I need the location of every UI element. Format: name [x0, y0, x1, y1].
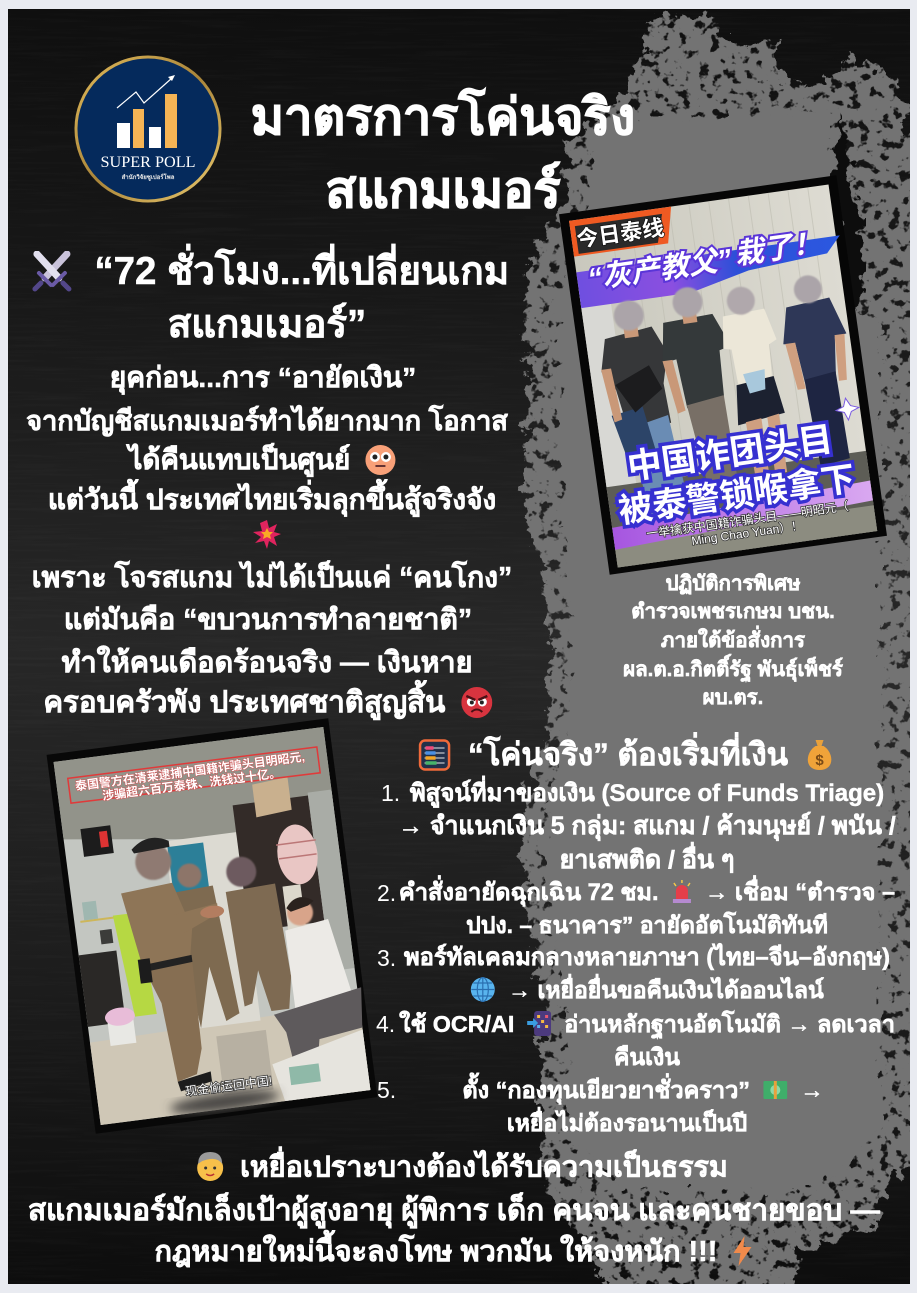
caption under photo: ผบ.ตร. — [703, 686, 763, 709]
item 5: เหยื่อไม่ต้องรอนานเป็นปี — [507, 1110, 747, 1136]
photo: arrest of scam leader at airport: 一举擒获中国籍诈骗头目——明昭元（ — [645, 498, 849, 541]
left text: 72 hours heading and body: แต่มันคือ “ขบวนการทำลายชาติ” — [64, 604, 472, 636]
item 5: ตั้ง “กองทุนเยียวยาชั่วคราว” → — [462, 1077, 824, 1103]
icon: explosion — [253, 520, 281, 549]
photo: arrest of scam leader at airport: 今日泰线 — [575, 215, 666, 252]
line 3 with lightning icon: กฎหมายใหม่นี้จะลงโทษ พวกมัน ให้จงหนัก !!! — [155, 1236, 717, 1268]
item 1: 1. — [381, 780, 400, 806]
item 1: ยาเสพติด / อื่น ๆ — [560, 846, 734, 874]
left text: 72 hours heading and body: จากบัญชีสแกมเมอร์ทำได้ยากมาก โอกาส — [26, 405, 508, 436]
section heading with abacus and money bag — [418, 732, 832, 772]
caption under photo: ผล.ต.อ.กิตติ์รัฐ พันธุ์เพ็ชร์ — [623, 658, 843, 681]
photo: police in room — [46, 718, 378, 1134]
section heading with abacus and money bag: “โค่นจริง” ต้องเริ่มที่เงิน — [468, 737, 788, 772]
background officers — [173, 884, 241, 1030]
item 2: 2. — [377, 880, 396, 906]
item 1: → จำแนกเงิน 5 กลุ่ม: สแกม / ค้ามนุษย์ / พนัน / — [398, 813, 896, 840]
pink backpack — [274, 822, 321, 887]
bottom statement — [28, 1146, 880, 1268]
line 2: สแกมเมอร์มักเล็งเป้าผู้สูงอายุ ผู้พิการ เด็ก คนจน และคนชายขอบ — — [28, 1194, 880, 1227]
item 5 — [377, 1072, 824, 1136]
caption under photo: ตำรวจเพชรเกษม บชน. — [631, 600, 835, 623]
back wall and door — [165, 832, 261, 1030]
left text: 72 hours heading and body: ได้คืนแทบเป็นศูนย์ — [128, 444, 350, 475]
sign — [80, 825, 114, 857]
caption under photo: ปฏิบัติการพิเศษ — [665, 572, 801, 595]
right text: list of measures — [376, 732, 896, 1136]
caption band — [68, 746, 320, 805]
item 4: ใช้ OCR/AI อ่านหลักฐานอัตโนมัติ → ลดเวลา — [399, 1011, 895, 1037]
item 4: 4. — [376, 1011, 395, 1037]
orange tag — [569, 207, 676, 257]
caption under photo — [623, 572, 844, 709]
item 4: คืนเงิน — [614, 1044, 680, 1070]
photo: police in room: 现金偷运回中国! — [184, 1073, 273, 1099]
body paragraph: ยุคก่อน...การ “อายัดเงิน” — [110, 361, 416, 393]
title: มาตรการโค่นจริง — [251, 88, 635, 145]
person 2 — [653, 282, 750, 490]
item 3: 3. — [377, 945, 396, 971]
floor rug — [216, 1030, 274, 1096]
item 1 — [381, 776, 896, 874]
photo: arrest of scam leader at airport: 栽了！ — [733, 227, 823, 271]
item 3 — [377, 942, 890, 1003]
photo: arrest of scam leader at airport: 中国诈团头目 — [625, 421, 835, 487]
item 5: 5. — [377, 1077, 396, 1103]
caption under photo: ภายใต้ข้อสั่งการ — [661, 629, 805, 652]
person 1 — [592, 296, 690, 520]
left text: 72 hours heading and body — [26, 244, 512, 720]
item 3: พอร์ทัลเคลมกลางหลายภาษา (ไทย–จีน–อังกฤษ) — [404, 945, 890, 971]
body paragraph 2: เพราะ โจรสแกม ไม่ได้เป็นแค่ “คนโกง” — [32, 562, 512, 594]
seated woman — [284, 917, 353, 1010]
item 3: → เหยื่อยื่นขอคืนเงินได้ออนไลน์ — [508, 977, 824, 1003]
logo: Super Poll — [74, 56, 222, 202]
person 4 — [774, 271, 864, 469]
line with elderly person icon: เหยื่อเปราะบางต้องได้รับความเป็นธรรม — [240, 1152, 728, 1184]
item 1: พิสูจน์ที่มาของเงิน (Source of Funds Triage) — [410, 780, 884, 807]
person 3 — [715, 283, 795, 478]
photo: arrest of scam leader at airport: “灰产教父” — [586, 244, 734, 296]
left text: 72 hours heading and body: สแกมเมอร์” — [168, 303, 366, 346]
item 2: คำสั่งอายัดฉุกเฉิน 72 ชม. → เชื่อม “ตำรวจ – — [399, 880, 895, 906]
left text: 72 hours heading and body: ครอบครัวพัง ประเทศชาติสูญสิ้น — [43, 686, 445, 719]
photo: arrest of scam leader at airport: Ming Chao Yuan）！ — [691, 518, 804, 548]
table — [269, 1029, 370, 1102]
photo: police in room: 泰国警方在清莱逮捕中国籍诈骗头目明昭元, — [74, 749, 306, 793]
shelf and cabinet — [80, 916, 118, 923]
title: สแกมเมอร์ — [325, 161, 561, 218]
headline band — [576, 235, 845, 308]
blurred foreground — [169, 1086, 280, 1118]
section heading with abacus and money bag: $ — [815, 752, 824, 769]
title — [251, 86, 635, 218]
item 4 — [376, 1010, 895, 1070]
item 2: ปปง. – ธนาคาร” อายัดอัตโนมัติทันที — [466, 912, 828, 938]
bottom headline — [611, 481, 875, 550]
main officer — [121, 881, 196, 969]
logo: Super Poll: SUPER POLL — [100, 154, 196, 171]
item 2 — [377, 875, 895, 938]
left text: 72 hours heading and body: ทำให้คนเดือดร้อนจริง — เงินหาย — [62, 647, 472, 679]
photo: arrest of scam leader at airport — [559, 176, 887, 575]
photo: police in room: 涉骗超六百万泰铢、洗钱过十亿。 — [101, 765, 282, 803]
left text: 72 hours heading and body: แต่วันนี้ ประเทศไทยเริ่มลุกขึ้นสู้จริงจัง — [48, 484, 496, 515]
photo: arrest of scam leader at airport: 被泰警锁喉拿下 — [616, 459, 857, 531]
heading line 1 with crossed swords icon: “72 ชั่วโมง...ที่เปลี่ยนเกม — [94, 250, 509, 293]
logo: Super Poll: สำนักวิจัยซูเปอร์โพล — [122, 173, 175, 182]
